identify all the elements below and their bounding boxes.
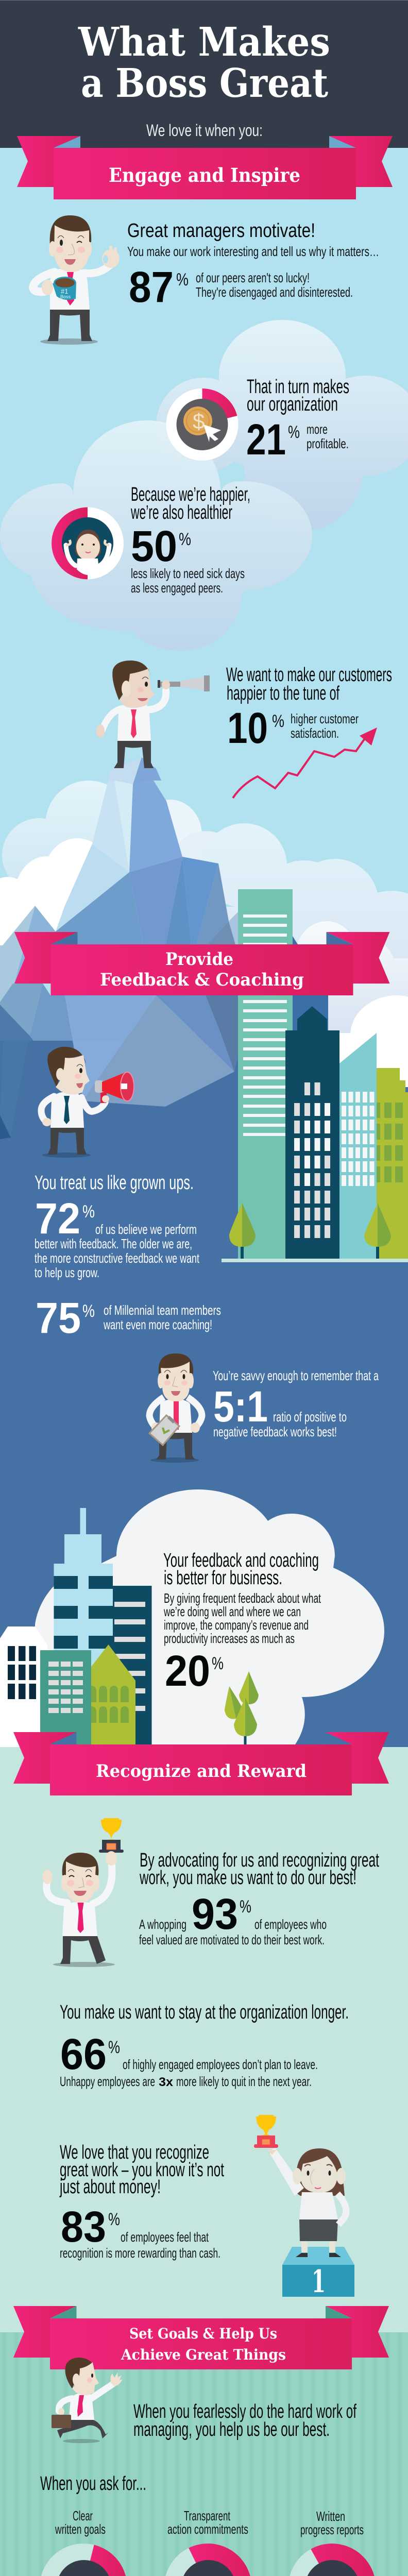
text: feedback better for business, 20 percent: Your feedback and coaching xyxy=(163,1550,319,1571)
donut icon: 50 percent healthier xyxy=(52,507,124,579)
text: 93 percent motivated: % xyxy=(240,1897,251,1917)
text: 66 percent stay longer: of highly engaged employees don’t plan to leave. xyxy=(123,2057,318,2072)
text: 10 percent higher customer satisfaction: happier to the tune of xyxy=(227,683,339,704)
man with megaphone xyxy=(41,1047,134,1158)
text: 5:1 ratio xyxy=(213,1368,379,1439)
man with telescope xyxy=(96,660,210,768)
trees cluster xyxy=(225,1671,259,1744)
donut chart: clear written goals 43 percent: Clear xyxy=(73,2508,93,2523)
text: 10 percent higher customer satisfaction: 10 xyxy=(227,704,268,752)
text: 72 percent perform better: % xyxy=(82,1202,95,1222)
donut chart: transparent action commitments 64 percent xyxy=(164,2508,252,2576)
text: 72 percent perform better: better with feedback. The older we are, xyxy=(35,1236,192,1251)
text: 50 percent less sick days: Because we’re happier, xyxy=(131,484,250,505)
skyline: right towers xyxy=(222,889,408,1262)
text: 50 percent less sick days: 50 xyxy=(131,522,177,570)
text: 5:1 ratio: 5:1 xyxy=(213,1382,268,1431)
text: 50 percent less sick days: we’re also healthier xyxy=(130,502,232,523)
text: 66 percent stay longer: 3x xyxy=(159,2075,174,2089)
text: feedback better for business, 20 percent: % xyxy=(212,1654,224,1673)
cloud behind 21 percent xyxy=(156,320,408,531)
text: 10 percent higher customer satisfaction: higher customer xyxy=(291,711,359,726)
stat: 87 percent: of our peers aren't so lucky! xyxy=(196,270,310,285)
stat: 87 percent xyxy=(129,263,353,311)
donut chart: transparent action commitments 64 percent: Transparent xyxy=(184,2508,231,2523)
mountain xyxy=(0,757,238,1139)
donut chart: transparent action commitments 64 percent: action commitments xyxy=(167,2521,248,2537)
ribbon: engage and inspire: Engage and Inspire xyxy=(109,164,300,187)
ribbon: recognize and reward xyxy=(13,1732,389,1795)
stat: 87 percent: % xyxy=(176,270,189,290)
text: when you ask for: When you ask for... xyxy=(40,2473,146,2495)
donut chart: clear written goals 43 percent xyxy=(40,2508,127,2576)
text: 66 percent stay longer xyxy=(60,2002,349,2089)
stat: 75 percent: 75 xyxy=(36,1294,81,1342)
text: 10 percent higher customer satisfaction: satisfaction. xyxy=(291,725,339,741)
title: What Makes xyxy=(78,19,330,65)
text: 72 percent perform better: 72 xyxy=(35,1194,80,1243)
woman on podium with trophy xyxy=(254,2115,354,2300)
intro line: We love it when you: xyxy=(146,121,263,140)
text: feedback better for business, 20 percent: By giving frequent feedback about what xyxy=(164,1590,321,1606)
donut icon: 21 percent profit xyxy=(166,388,238,461)
stat: 87 percent: 87 xyxy=(129,263,174,311)
man with clipboard xyxy=(149,1353,202,1463)
text: 83 percent recognition: of employees feel that xyxy=(121,2229,209,2245)
text: 83 percent recognition xyxy=(59,2142,224,2261)
text: 93 percent motivated: 93 xyxy=(192,1890,238,1938)
text: 83 percent recognition: We love that you recognize xyxy=(60,2142,209,2163)
text: 83 percent recognition: great work – you know it’s not xyxy=(60,2159,224,2181)
donut icon: 21 percent profit: $ xyxy=(193,409,205,433)
ribbon: set goals and achieve: Achieve Great Things xyxy=(121,2346,286,2363)
ribbon: provide feedback and coaching xyxy=(14,932,389,995)
clouds behind mountain xyxy=(0,781,408,1087)
trophy held by man xyxy=(99,1818,124,1853)
text: feedback better for business, 20 percent: 20 xyxy=(165,1647,210,1695)
text: 50 percent less sick days: less likely to need sick days xyxy=(131,566,245,581)
text: 72 percent perform better: of us believe we perform xyxy=(95,1222,197,1237)
text: 66 percent stay longer: % xyxy=(108,2038,120,2057)
stat: 75 percent: want even more coaching! xyxy=(103,1317,212,1332)
text: 93 percent motivated xyxy=(139,1850,379,1947)
woman on podium with trophy: 1 xyxy=(312,2264,326,2300)
stat: 75 percent xyxy=(36,1294,221,1342)
text: 21 percent more profitable: our organization xyxy=(247,394,338,415)
text: 21 percent more profitable: That in turn makes xyxy=(247,376,349,398)
text: feedback better for business, 20 percent: is better for business. xyxy=(164,1567,282,1589)
skyline: left buildings xyxy=(0,1508,151,1748)
text: 21 percent more profitable xyxy=(246,376,349,464)
text: 93 percent motivated: A whopping xyxy=(139,1917,186,1932)
donut chart: written progress reports 76 percent: Written xyxy=(316,2509,345,2524)
text: 93 percent motivated: of employees who xyxy=(254,1917,327,1932)
text: 10 percent higher customer satisfaction: % xyxy=(272,711,284,731)
donut chart: written progress reports 76 percent: progress reports xyxy=(300,2522,364,2537)
title xyxy=(78,19,330,107)
text: 66 percent stay longer: 66 xyxy=(60,2030,107,2078)
cloud behind 50 percent xyxy=(0,420,312,651)
text: great managers motivate: Great managers motivate! xyxy=(127,220,315,242)
text: 21 percent more profitable: 21 xyxy=(246,415,286,464)
ribbon: provide feedback and coaching: Feedback & Coaching xyxy=(100,970,304,990)
text: 66 percent stay longer: more likely to quit in the next year. xyxy=(176,2074,312,2089)
donut chart: written progress reports 76 percent xyxy=(288,2509,376,2576)
stat: 75 percent: % xyxy=(82,1301,95,1321)
text: 21 percent more profitable: profitable. xyxy=(307,436,349,451)
text: feedback better for business, 20 percent: productivity increases as much as xyxy=(164,1631,295,1646)
title: a Boss Great xyxy=(81,60,328,107)
text: 5:1 ratio: negative feedback works best! xyxy=(213,1424,337,1439)
text: 72 percent perform better: to help us grow. xyxy=(35,1265,99,1280)
text: 72 percent perform better xyxy=(35,1172,200,1280)
man with coffee mug: Boss xyxy=(60,294,71,299)
white cloud behind business text xyxy=(35,1489,384,1744)
arrow: growth chart xyxy=(233,727,377,798)
text: 5:1 ratio: ratio of positive to xyxy=(273,1409,347,1425)
text: 50 percent less sick days: % xyxy=(179,530,191,549)
text: 66 percent stay longer: Unhappy employees are xyxy=(60,2074,155,2089)
ribbon: provide feedback and coaching: Provide xyxy=(165,949,233,970)
man with coffee mug xyxy=(33,215,120,345)
text: feedback better for business, 20 percent: improve, the company’s revenue and xyxy=(164,1617,309,1633)
text: 83 percent recognition: recognition is more rewarding than cash. xyxy=(60,2245,220,2261)
text: 21 percent more profitable: % xyxy=(288,422,300,442)
text: feedback better for business, 20 percent: we’re doing well and where we can xyxy=(163,1604,301,1619)
ribbon: set goals and achieve xyxy=(13,2306,389,2369)
text: 21 percent more profitable: more xyxy=(307,421,328,437)
text: feedback better for business, 20 percent xyxy=(163,1550,321,1695)
ribbon: set goals and achieve: Set Goals & Help Us xyxy=(129,2325,277,2342)
text: 83 percent recognition: just about money! xyxy=(59,2176,161,2198)
man cheering xyxy=(42,1851,117,1967)
text: 72 percent perform better: You treat us like grown ups. xyxy=(35,1172,194,1194)
man running with briefcase xyxy=(52,2358,123,2443)
ribbon: engage and inspire xyxy=(17,136,393,199)
stat: 75 percent: of Millennial team members xyxy=(104,1302,221,1318)
text: great managers motivate xyxy=(127,220,379,259)
donut chart: clear written goals 43 percent: written goals xyxy=(55,2521,106,2537)
text: 72 percent perform better: the more constructive feedback we want xyxy=(35,1250,200,1266)
text: 83 percent recognition: % xyxy=(108,2210,120,2229)
ribbon: recognize and reward: Recognize and Reward xyxy=(96,1761,307,1782)
text: 83 percent recognition: 83 xyxy=(61,2202,106,2251)
text: 50 percent less sick days: as less engaged peers. xyxy=(131,580,223,596)
man with coffee mug: #1 xyxy=(61,287,68,295)
text: 10 percent higher customer satisfaction xyxy=(226,664,392,752)
text: 50 percent less sick days xyxy=(130,484,250,596)
